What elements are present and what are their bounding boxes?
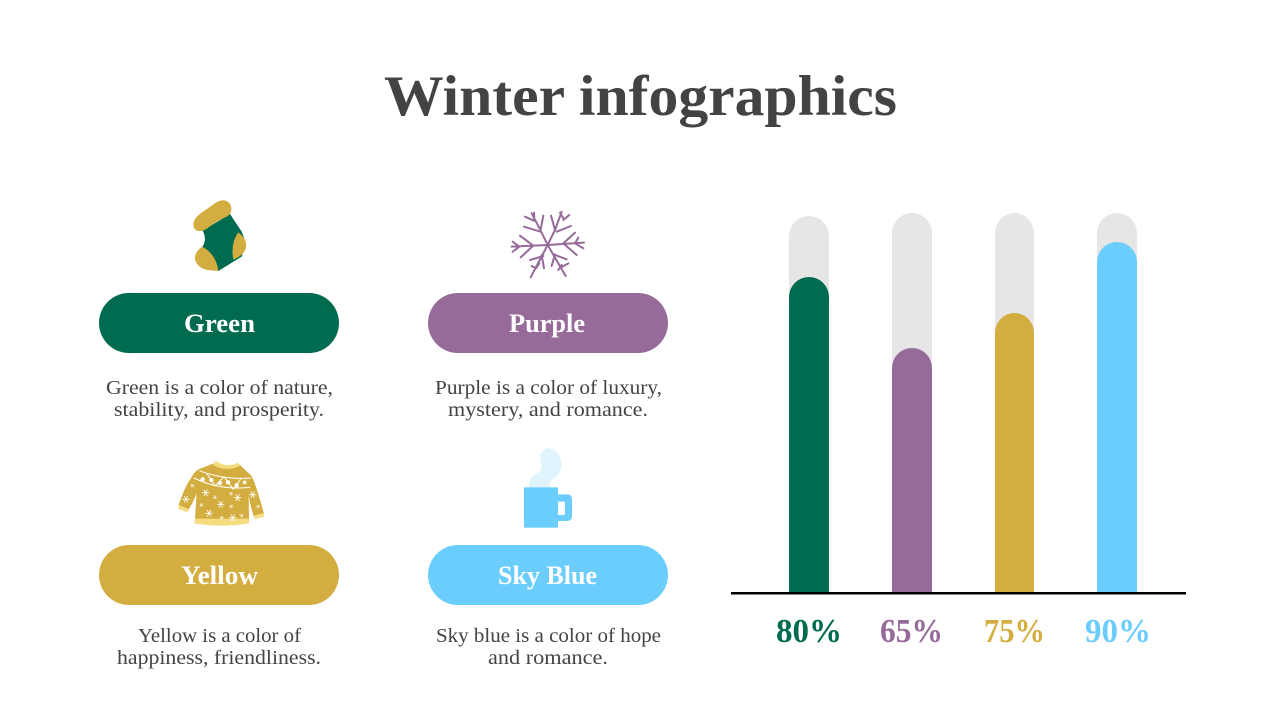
bar: green 80%: [776, 216, 842, 650]
sky blue pill: Sky Blue: [498, 561, 597, 590]
panel: purple: [428, 212, 668, 421]
panel: green: [99, 200, 339, 421]
purple pill: Purple: [509, 309, 585, 338]
yellow description: Yellow is a color of: [138, 625, 301, 647]
sky blue description: Sky blue is a color of hope: [436, 625, 661, 647]
chart axis: [731, 592, 1186, 594]
icon: stocking: [193, 200, 246, 271]
panel: sky blue: [428, 448, 668, 669]
yellow pill: [99, 545, 339, 605]
sky blue pill: [428, 545, 668, 605]
panel: yellow: [99, 461, 339, 669]
sky blue description: [436, 625, 661, 669]
bar: yellow 75%: 75%: [984, 613, 1045, 650]
purple description: Purple is a color of luxury,: [435, 377, 662, 399]
icon: snowflake: [512, 212, 584, 277]
green description: [106, 377, 333, 421]
bar: sky blue 90%: [1085, 213, 1151, 650]
icon: mug: [524, 448, 572, 528]
bar: sky blue 90%: 90%: [1085, 613, 1151, 650]
sky blue description: and romance.: [488, 647, 608, 669]
yellow pill: Yellow: [181, 561, 258, 590]
icon: sweater: [178, 461, 265, 526]
purple description: [435, 377, 662, 421]
bar chart: [731, 213, 1186, 650]
yellow description: happiness, friendliness.: [117, 647, 321, 669]
bar: purple 65%: 65%: [880, 613, 943, 650]
green description: Green is a color of nature,: [106, 377, 333, 399]
bar: green 80%: 80%: [776, 613, 842, 650]
bar: yellow 75%: [984, 213, 1045, 650]
green pill: Green: [184, 309, 256, 338]
purple pill: [428, 293, 668, 353]
green description: stability, and prosperity.: [114, 399, 324, 421]
purple description: mystery, and romance.: [448, 399, 648, 421]
green pill: [99, 293, 339, 353]
title: Winter infographics: [384, 65, 897, 128]
bar: purple 65%: [880, 213, 943, 650]
yellow description: [117, 625, 321, 669]
